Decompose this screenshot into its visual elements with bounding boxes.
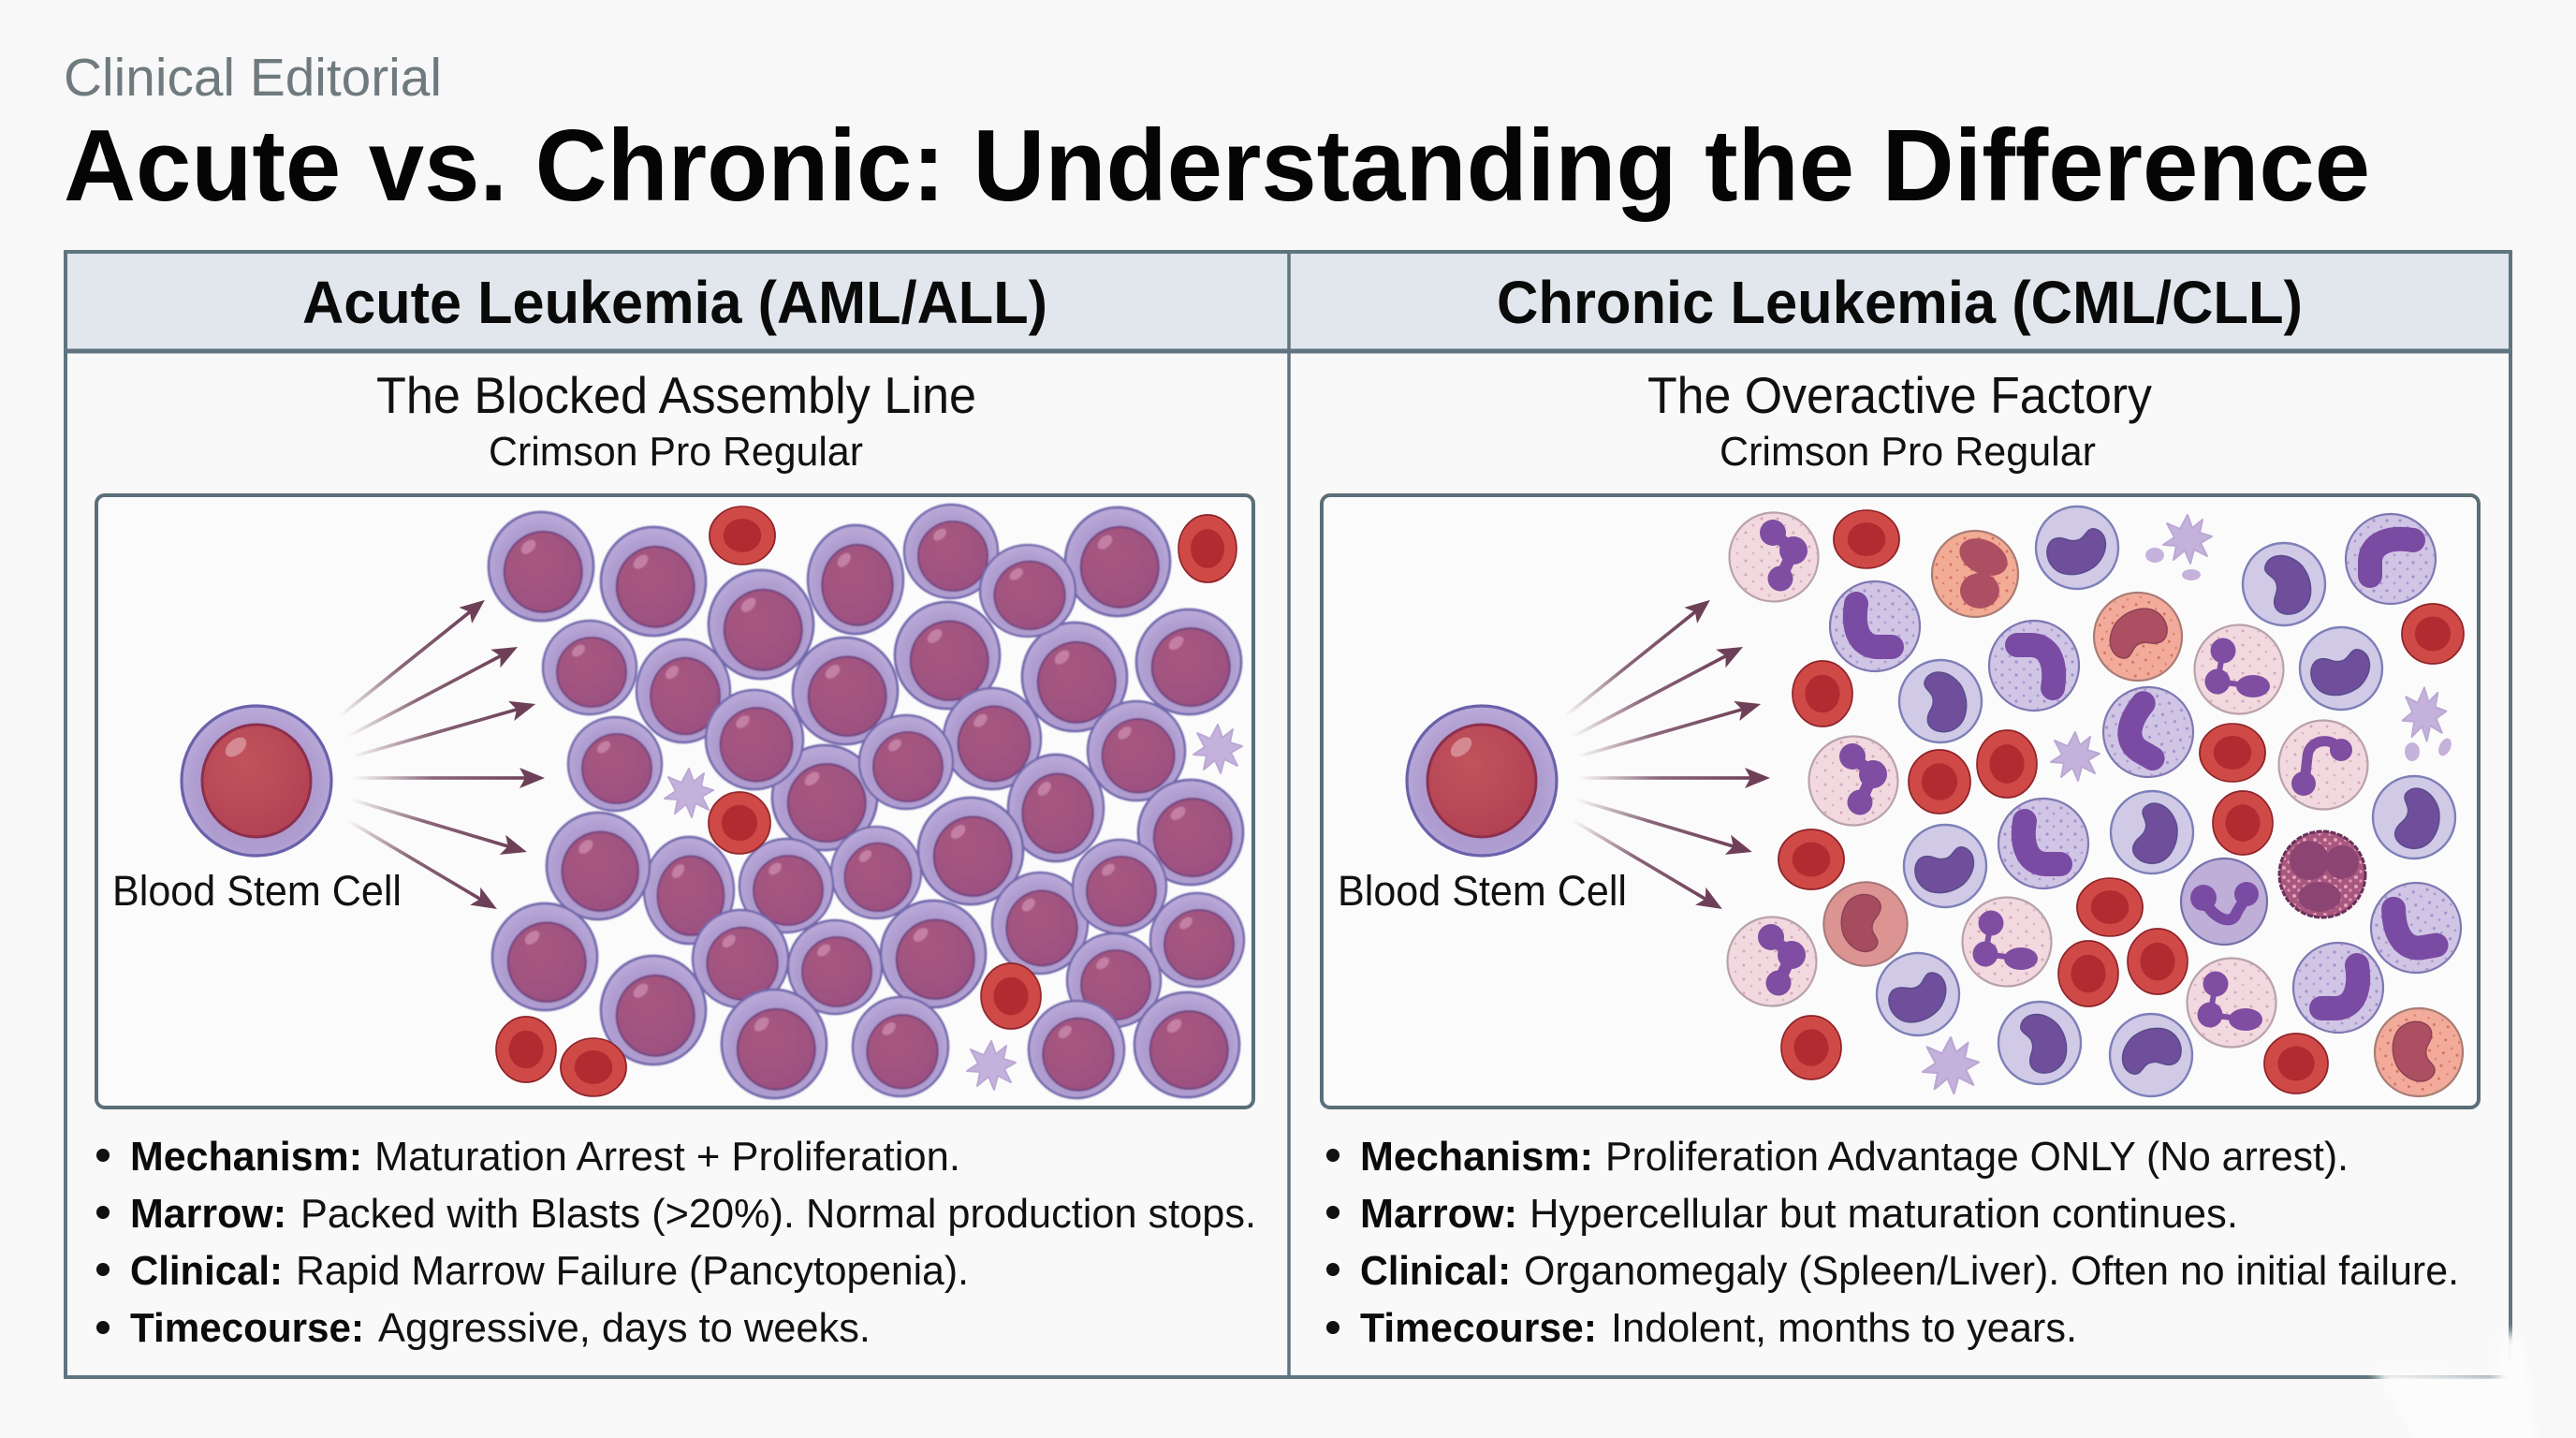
bullet list: acute: Mechanism: bbox=[130, 1134, 362, 1180]
caption: font name: Crimson Pro Regular bbox=[1720, 429, 2096, 475]
bullet list: acute: Rapid Marrow Failure (Pancytopenia). bbox=[296, 1248, 969, 1294]
bullet list: acute: Aggressive, days to weeks. bbox=[378, 1305, 871, 1351]
white blood cells: granular band cells bbox=[1830, 514, 2468, 1033]
bullet list: chronic: Clinical: bbox=[1360, 1248, 1511, 1294]
arrows: stem cell to blasts bbox=[333, 592, 545, 917]
bullet list: acute: Timecourse: bbox=[130, 1305, 364, 1351]
panel: acute leukemia bbox=[96, 269, 1256, 1351]
bullet list: acute: Clinical: bbox=[130, 1248, 283, 1294]
icon: blood stem cell bbox=[1407, 706, 1557, 856]
caption: font name: Crimson Pro Regular bbox=[489, 429, 863, 475]
cell: monocyte with U-shaped nucleus bbox=[2181, 858, 2267, 945]
bullet list: chronic: Proliferation Advantage ONLY (No arrest). bbox=[1605, 1134, 2349, 1180]
bullet list: acute bbox=[96, 1134, 1256, 1351]
bullet list: chronic: Hypercellular but maturation continues. bbox=[1530, 1191, 2238, 1237]
bullet list: acute: Packed with Blasts (>20%). Normal production stops. bbox=[300, 1191, 1256, 1237]
label: blood stem cell: Blood Stem Cell bbox=[1338, 867, 1627, 915]
title: Acute vs. Chronic: Understanding the Difference bbox=[64, 109, 2370, 223]
cell: dark granular basophil bbox=[2279, 831, 2365, 917]
bullet list: acute: Maturation Arrest + Proliferation. bbox=[374, 1134, 960, 1180]
red blood cells: acute bbox=[496, 506, 1237, 1096]
bullet list: chronic bbox=[1326, 1134, 2459, 1351]
platelets: chronic bbox=[1923, 515, 2454, 1093]
column heading: acute: Acute Leukemia (AML/ALL) bbox=[302, 269, 1047, 336]
erased corner smudge bbox=[2373, 1333, 2537, 1438]
blast cell cluster bbox=[489, 505, 1244, 1098]
arrows: stem cell to mixed cells bbox=[1559, 592, 1770, 917]
white blood cells: neutrophils bbox=[1728, 513, 2368, 1047]
bullet list: acute: Marrow: bbox=[130, 1191, 286, 1237]
bullet list: chronic: Mechanism: bbox=[1360, 1134, 1593, 1180]
white blood cells: monocytes and lymphocytes bbox=[1870, 506, 2470, 1096]
subtitle: overactive factory: The Overactive Factory bbox=[1647, 366, 2152, 424]
bullet list: chronic: Indolent, months to years. bbox=[1611, 1305, 2077, 1351]
illustration box: acute marrow bbox=[96, 495, 1253, 1108]
bullet list: chronic: Timecourse: bbox=[1360, 1305, 1597, 1351]
platelets: acute bbox=[665, 725, 1242, 1090]
bullet list: chronic: Marrow: bbox=[1360, 1191, 1517, 1237]
column heading: chronic: Chronic Leukemia (CML/CLL) bbox=[1497, 269, 2303, 336]
eyebrow: Clinical Editorial: Clinical Editorial bbox=[64, 48, 442, 108]
red blood cells: chronic bbox=[1778, 510, 2464, 1093]
icon: blood stem cell bbox=[182, 706, 331, 856]
subtitle: blocked assembly line: The Blocked Assembly Line bbox=[376, 366, 976, 424]
cells: eosinophils kidney nucleus bbox=[1812, 586, 2469, 1103]
comparison table frame bbox=[66, 252, 2510, 1377]
bullet list: chronic: Organomegaly (Spleen/Liver). Often no initial failure. bbox=[1524, 1248, 2459, 1294]
illustration box: chronic marrow bbox=[1322, 495, 2479, 1108]
label: blood stem cell: Blood Stem Cell bbox=[112, 867, 402, 915]
panel: chronic leukemia bbox=[1322, 269, 2479, 1351]
cell: eosinophil bilobed bbox=[1932, 531, 2018, 617]
